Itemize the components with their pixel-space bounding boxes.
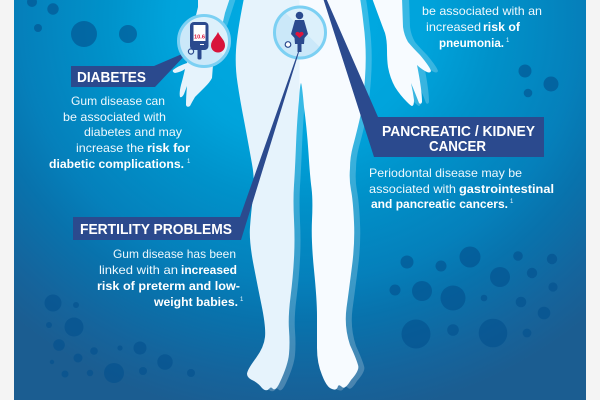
body silhouette	[173, 0, 431, 390]
fertility banner with pointer	[73, 52, 299, 240]
diabetes body text: Gum disease can	[71, 94, 165, 108]
fertility body text: increased	[181, 263, 237, 277]
torso and legs	[236, 0, 366, 390]
cancer body text: Periodontal disease may be	[369, 166, 522, 180]
cancer body text	[369, 166, 554, 211]
cancer body text: gastrointestinal	[459, 182, 554, 196]
callout: diabetes	[49, 51, 191, 171]
fertility body text: Gum disease has been	[113, 247, 236, 261]
callout text: pneumonia: risk of	[483, 20, 521, 34]
callout text: pneumonia: be associated with an	[422, 4, 542, 18]
cancer heading: CANCER	[429, 138, 486, 155]
icon: glucose meter and blood drop: 10.6	[194, 34, 205, 40]
diabetes banner	[71, 51, 189, 87]
left arm and hand	[173, 0, 230, 107]
diabetes body text: risk for	[147, 141, 190, 155]
callout text: pneumonia	[422, 4, 542, 50]
cancer heading	[382, 123, 535, 155]
diabetes heading: DIABETES	[77, 69, 146, 86]
fertility body text: 1	[240, 297, 244, 303]
diabetes body text: diabetes and may	[84, 125, 182, 139]
cancer banner with pointer	[323, 0, 544, 157]
fertility body text: risk of preterm and low-	[97, 279, 240, 293]
fertility body text: linked with an	[99, 263, 178, 277]
callout: fertility problems	[73, 52, 299, 309]
cancer body text: and pancreatic cancers.	[371, 197, 508, 211]
fertility heading: FERTILITY PROBLEMS	[80, 221, 232, 238]
diabetes body text: be associated with	[63, 110, 166, 124]
icon: pregnant figure	[274, 7, 326, 58]
diabetes body text	[49, 94, 191, 171]
callout: pancreatic and kidney cancer	[323, 0, 554, 211]
fertility body text	[97, 247, 244, 309]
diabetes body text: diabetic complications.	[49, 157, 184, 171]
cancer body text: associated with	[369, 182, 456, 196]
cancer body text: 1	[510, 199, 514, 205]
diabetes body text: 1	[187, 159, 191, 165]
icon: glucose meter and blood drop	[178, 16, 230, 66]
right arm and hand	[372, 0, 431, 106]
callout text: pneumonia: 1	[506, 38, 510, 44]
body silhouette shadow	[222, 0, 438, 391]
cancer heading: PANCREATIC / KIDNEY	[382, 123, 535, 140]
callout text: pneumonia: pneumonia.	[439, 36, 504, 50]
fertility body text: weight babies.	[153, 295, 238, 309]
callout text: pneumonia: increased	[426, 20, 481, 34]
diabetes body text: increase the	[76, 141, 144, 155]
